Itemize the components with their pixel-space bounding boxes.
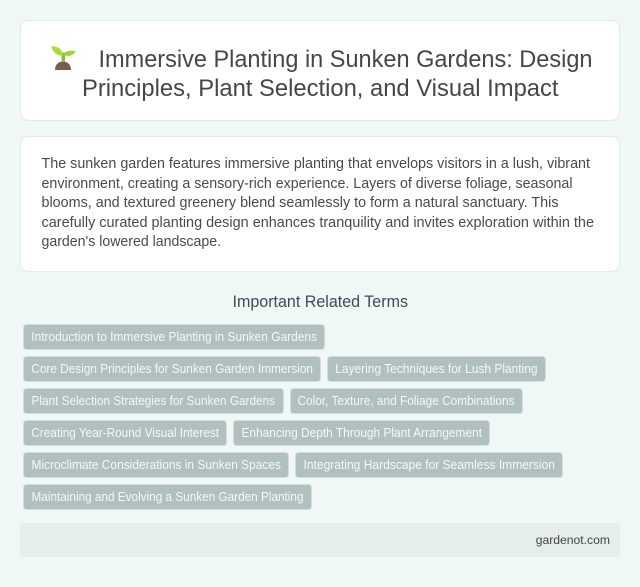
panel: description card bbox=[20, 136, 620, 272]
title: Principles, Plant Selection, and Visual Impact bbox=[82, 75, 559, 102]
tag: Color, Texture, and Foliage Combinations bbox=[298, 394, 514, 408]
tag bbox=[24, 356, 320, 382]
tag bbox=[296, 452, 562, 478]
tag bbox=[24, 324, 324, 350]
footer source text: gardenot.com bbox=[536, 533, 610, 547]
tag: Maintaining and Evolving a Sunken Garden Planting bbox=[32, 490, 304, 504]
title: Immersive Planting in Sunken Gardens: Design bbox=[98, 46, 592, 73]
tag bbox=[234, 420, 490, 446]
tag: Layering Techniques for Lush Planting bbox=[335, 362, 538, 376]
description text: garden's lowered landscape. bbox=[42, 234, 221, 250]
heading: related terms: Important Related Terms bbox=[232, 293, 408, 311]
icon: seedling bbox=[51, 46, 76, 70]
tag: Introduction to Immersive Planting in Sunken Gardens bbox=[31, 330, 317, 344]
tag bbox=[290, 388, 522, 414]
description text bbox=[42, 156, 594, 250]
tag: Integrating Hardscape for Seamless Immersion bbox=[304, 458, 555, 472]
panel: title card bbox=[20, 20, 620, 120]
tag: Creating Year-Round Visual Interest bbox=[31, 426, 219, 440]
tag: Microclimate Considerations in Sunken Spaces bbox=[32, 458, 281, 472]
description text: The sunken garden features immersive planting that envelops visitors in a lush, vibrant bbox=[42, 156, 590, 172]
tag bbox=[328, 356, 546, 382]
tag: Enhancing Depth Through Plant Arrangement bbox=[242, 426, 482, 440]
tag bbox=[24, 420, 226, 446]
tag bbox=[24, 388, 284, 414]
tag bbox=[24, 484, 312, 510]
tag: Plant Selection Strategies for Sunken Gardens bbox=[32, 394, 275, 408]
description text: environment, creating a sensory-rich experience. Layers of diverse foliage, seasonal bbox=[42, 176, 572, 192]
description text: blooms, and textured greenery blend seamlessly to form a natural sanctuary. This bbox=[42, 195, 558, 211]
tag bbox=[24, 452, 288, 478]
title bbox=[82, 46, 592, 102]
description text: carefully curated planting design enhances tranquility and invites exploration within the bbox=[42, 215, 594, 231]
footer bbox=[20, 523, 620, 557]
tag: Core Design Principles for Sunken Garden Immersion bbox=[31, 362, 313, 376]
related terms tags bbox=[24, 324, 562, 510]
